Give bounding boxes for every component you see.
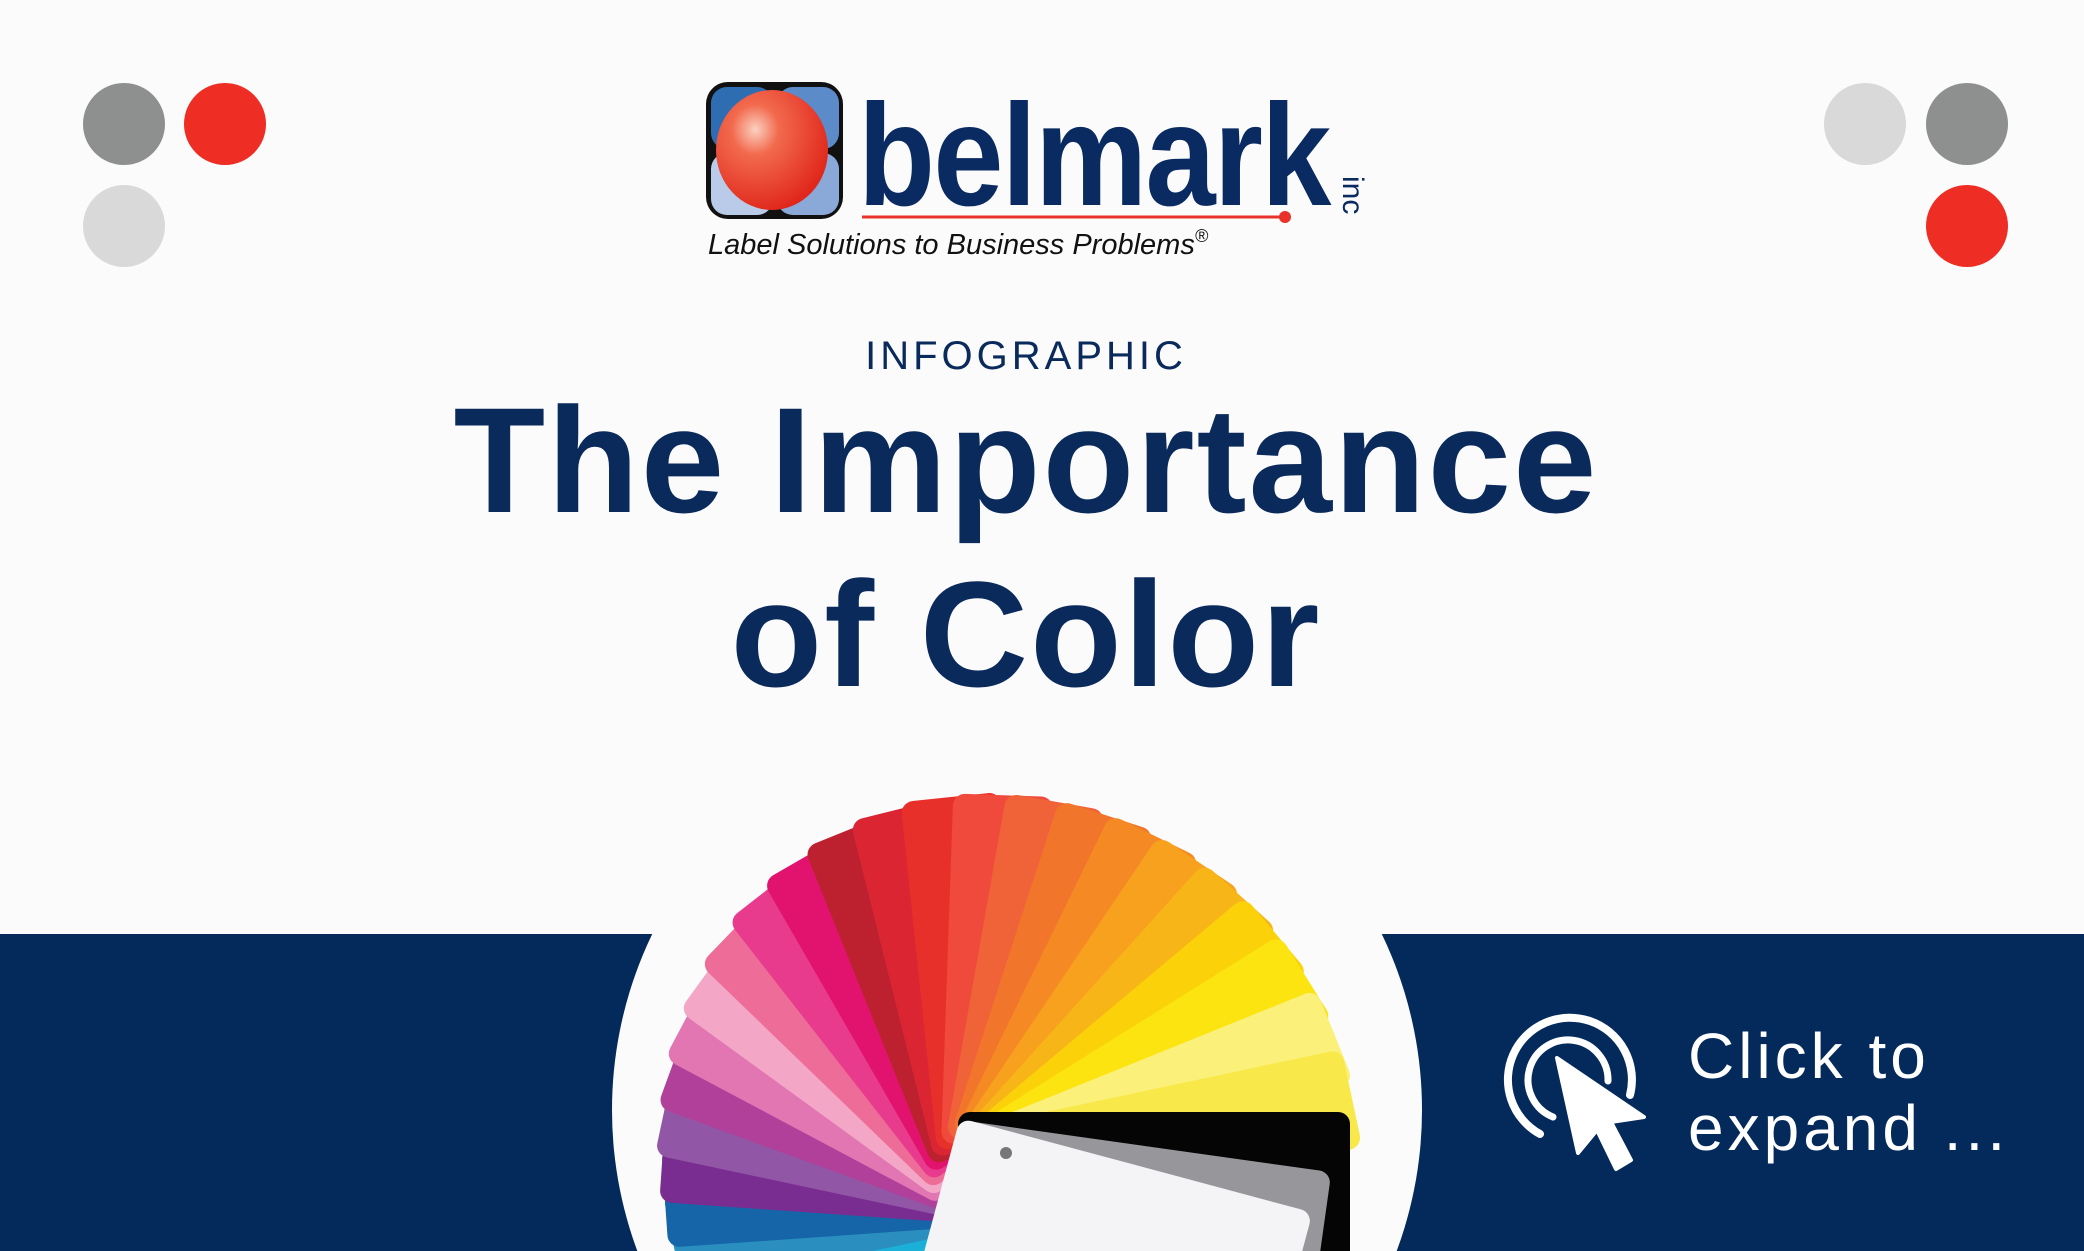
logo: belmark: ®: [1195, 226, 1209, 246]
logo: belmark: belmark: [858, 78, 1332, 236]
callout text: click to expand: expand ...: [1688, 1092, 2009, 1164]
title: The Importance: [454, 376, 1598, 544]
decorative dots: top-left: [83, 83, 266, 267]
logo: belmark: inc: [1336, 176, 1369, 214]
subheading: INFOGRAPHIC: [865, 334, 1187, 378]
logo: belmark: Label Solutions to Business Problems: [708, 229, 1195, 261]
callout text: click to expand: Click to: [1688, 1020, 1930, 1092]
front cards: [958, 1112, 1350, 1251]
color fan swatches: [657, 793, 1360, 1251]
decorative dots: top-right: [1824, 83, 2008, 267]
title: [454, 376, 1598, 718]
title: of Color: [731, 550, 1321, 718]
icon: click cursor: [1504, 1014, 1646, 1172]
logo: belmark: [706, 78, 1369, 261]
callout text: click to expand: [1688, 1020, 2009, 1164]
navy band with ellipse cutout: [0, 934, 2084, 1251]
